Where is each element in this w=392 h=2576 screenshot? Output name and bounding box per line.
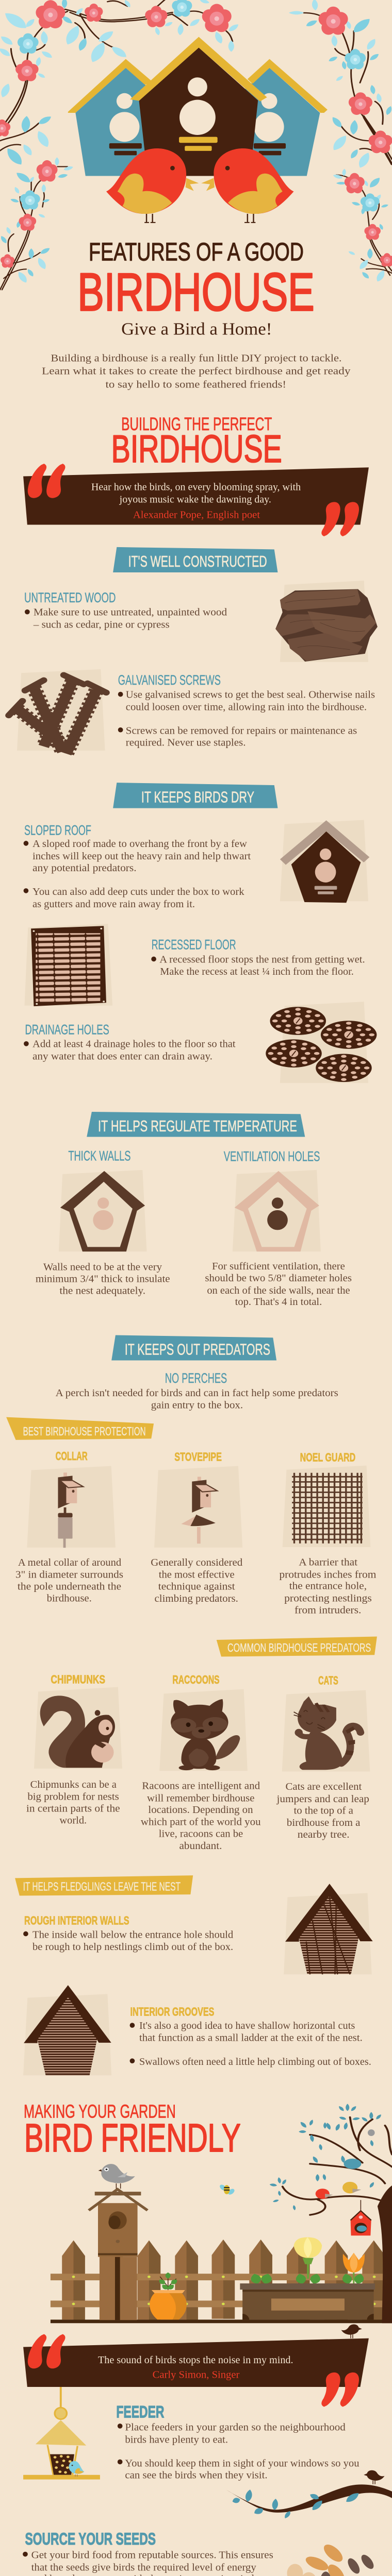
text block: raccoons: which part of the world you bbox=[141, 1816, 261, 1827]
panel: collar: the pole underneath the bbox=[18, 1581, 121, 1592]
illustration: lower right blossom branches bbox=[332, 168, 392, 283]
panel: ventilation holes: VENTILATION HOLES bbox=[224, 1149, 320, 1164]
panel: ventilation holes: top. That's 4 in total. bbox=[235, 1296, 322, 1307]
panel: collar: birdhouse. bbox=[47, 1592, 92, 1604]
text block: cats bbox=[276, 1781, 369, 1840]
illustration: rough interior birdhouse bbox=[284, 1884, 373, 1974]
text block: cats: Cats are excellent bbox=[286, 1781, 362, 1792]
panel: noel guard: A barrier that bbox=[299, 1556, 358, 1568]
text block: feeder: birds have plenty to eat. bbox=[125, 2433, 228, 2445]
icon: small bird on quote bbox=[341, 2324, 362, 2338]
panel: noel guard: from intruders. bbox=[295, 1604, 361, 1616]
text block: cats: nearby tree. bbox=[298, 1828, 350, 1840]
subtitle: Give a Bird a Home! bbox=[121, 319, 272, 338]
panel: collar: COLLAR bbox=[56, 1450, 88, 1463]
panel: stovepipe bbox=[151, 1451, 242, 1604]
text block: untreated wood bbox=[24, 590, 227, 630]
text block: cats: jumpers and can leap bbox=[276, 1793, 369, 1804]
text block: chipmunks: world. bbox=[59, 1815, 87, 1826]
panel: collar: A metal collar of around bbox=[18, 1556, 121, 1568]
text block: rough interior walls bbox=[23, 1914, 233, 1953]
panel: cats: CATS bbox=[318, 1674, 338, 1687]
tree bbox=[269, 2104, 392, 2323]
section: introduction bbox=[23, 319, 378, 662]
text block: rough interior walls: be rough to help nestlings climb out of the box. bbox=[32, 1941, 233, 1953]
intro text block: Learn what it takes to create the perfect birdhouse and get ready bbox=[42, 365, 351, 377]
grey bird bbox=[98, 2164, 135, 2189]
text block: sloped roof bbox=[24, 823, 251, 910]
text block: interior grooves bbox=[130, 2006, 371, 2067]
text block: sloped roof: You can also add deep cuts under the box to work bbox=[32, 886, 244, 897]
text block: recessed floor bbox=[151, 937, 365, 977]
text block: rough interior walls: ROUGH INTERIOR WALLS bbox=[24, 1914, 129, 1927]
text block: untreated wood: – such as cedar, pine or cypress bbox=[33, 619, 170, 630]
section: predators and protection bbox=[6, 1335, 376, 1616]
text block: sloped roof: A sloped roof made to overhang the front by a few bbox=[32, 838, 247, 850]
quote panel: Alexander Pope: joyous music wake the dawning day. bbox=[119, 493, 271, 505]
quote panel: Carly Simon: The sound of birds stops the noise in my mind. bbox=[98, 2354, 293, 2365]
text block: source your seeds bbox=[23, 2530, 273, 2576]
text block: raccoons: Racoons are intelligent and bbox=[142, 1780, 260, 1791]
orange pot bbox=[150, 2290, 187, 2319]
illustration: wood planks bbox=[275, 581, 378, 662]
text block: no perches: NO PERCHES bbox=[165, 1370, 227, 1386]
text block: chipmunks: big problem for nests bbox=[27, 1790, 119, 1802]
text block: raccoons: will remember birdhouse bbox=[147, 1792, 255, 1804]
illustration: bird feeder bbox=[23, 2387, 100, 2480]
illustration: right bird bbox=[201, 148, 294, 223]
text block: raccoons: locations. Depending on bbox=[148, 1804, 253, 1815]
panel: noel guard bbox=[279, 1451, 376, 1616]
heading: making your garden bird friendly: MAKING YOUR GARDEN bbox=[24, 2102, 176, 2122]
quote panel: Alexander Pope: Hear how the birds, on every blooming spray, with bbox=[91, 481, 301, 493]
illustration: seeds bbox=[282, 2542, 379, 2576]
flowers and plants bbox=[157, 2238, 365, 2291]
title bbox=[77, 238, 315, 322]
banner: common birdhouse predators bbox=[217, 1637, 377, 1656]
panel: thick walls bbox=[36, 1148, 170, 1296]
intro text block: to say hello to some feathered friends! bbox=[106, 378, 286, 390]
quote panel: Carly Simon: Carly Simon, Singer bbox=[153, 2369, 240, 2380]
text block: no perches: A perch isn't needed for birds and can in fact help some predators bbox=[56, 1387, 338, 1399]
text block: sloped roof: as gutters and move rain away from it. bbox=[32, 898, 195, 910]
illustration: galvanised screws bbox=[9, 669, 106, 754]
section: interior grooves and garden scene bbox=[23, 1985, 392, 2323]
illustration: top right blossom branches bbox=[289, 0, 392, 169]
text block: feeder: Place feeders in your garden so the neighbourhood bbox=[125, 2421, 346, 2433]
text block: raccoons bbox=[141, 1780, 261, 1851]
text block: untreated wood: UNTREATED WOOD bbox=[24, 590, 116, 606]
panel: collar bbox=[15, 1450, 123, 1604]
banner: best birdhouse protection: BEST BIRDHOUSE PROTECTION bbox=[23, 1425, 146, 1438]
heading: building the perfect birdhouse: BIRDHOUSE bbox=[111, 427, 282, 470]
text block: feeder bbox=[116, 2403, 359, 2481]
text block: source your seeds: that the seeds give birds the required level of energy bbox=[31, 2561, 257, 2573]
text block: galvanised screws bbox=[118, 673, 375, 748]
panel: stovepipe: STOVEPIPE bbox=[174, 1451, 222, 1464]
text block: drainage holes bbox=[24, 1022, 236, 1062]
illustration: left bird bbox=[106, 148, 199, 223]
illustration: branch with bird bbox=[226, 2470, 392, 2519]
quote panel: Carly Simon bbox=[23, 2334, 369, 2407]
heading: building the perfect birdhouse bbox=[111, 414, 282, 470]
section: carly simon quote, feeder and seeds bbox=[23, 2324, 392, 2576]
quote panel: Alexander Pope bbox=[23, 464, 369, 536]
panel: raccoons bbox=[159, 1673, 248, 1771]
text block: feeder: can see the birds when they visit. bbox=[125, 2469, 268, 2481]
panel: thick walls: Walls need to be at the very bbox=[43, 1261, 162, 1273]
illustration: sloped roof birdhouse bbox=[280, 820, 369, 903]
banner: it helps regulate temperature bbox=[87, 1112, 305, 1137]
panel: cats bbox=[282, 1674, 370, 1771]
banner: it's well constructed: IT'S WELL CONSTRUCTED bbox=[128, 553, 267, 570]
panel: thick walls: the nest adequately. bbox=[59, 1285, 145, 1296]
text block: galvanised screws: Screws can be removed for repairs or maintenance as bbox=[126, 725, 357, 736]
wooden birdhouse on post bbox=[89, 2189, 148, 2320]
panel: noel guard: protecting nestlings bbox=[284, 1592, 372, 1604]
panel: ventilation holes: on each of the side walls, near the bbox=[207, 1284, 350, 1296]
banner: it keeps out predators bbox=[111, 1335, 276, 1361]
panel: noel guard: the entrance hole, bbox=[289, 1580, 367, 1591]
text block: feeder: FEEDER bbox=[116, 2403, 164, 2421]
text block: galvanised screws: required. Never use staples. bbox=[126, 737, 246, 748]
text block: cats: birdhouse from a bbox=[287, 1817, 361, 1828]
text block: chipmunks: Chipmunks can be a bbox=[30, 1778, 117, 1790]
illustration: top left blossom branches bbox=[0, 0, 240, 167]
heading: making your garden bird friendly bbox=[24, 2102, 241, 2160]
text block: rough interior walls: The inside wall below the entrance hole should bbox=[32, 1928, 233, 1940]
text block: sloped roof: any potential predators. bbox=[32, 862, 137, 874]
illustration: garden scene with fence, birdhouse, tree and planters bbox=[51, 2104, 392, 2323]
panel: stovepipe: Generally considered bbox=[151, 1556, 242, 1568]
panel: stovepipe: climbing predators. bbox=[155, 1592, 238, 1604]
text block: source your seeds: Get your bird food from reputable sources. This ensures bbox=[31, 2549, 273, 2561]
text block: recessed floor: RECESSED FLOOR bbox=[152, 937, 236, 953]
banner: it keeps birds dry bbox=[113, 783, 277, 808]
panel: ventilation holes: should be two 5/8" diameter holes bbox=[205, 1272, 352, 1284]
text block: chipmunks: in certain parts of the bbox=[26, 1802, 120, 1814]
intro text block: Building a birdhouse is a really fun little DIY project to tackle. bbox=[51, 352, 342, 364]
section: hero bbox=[0, 0, 392, 322]
panel: ventilation holes: For sufficient ventilation, there bbox=[212, 1260, 345, 1272]
panel: collar: 3" in diameter surrounds bbox=[15, 1568, 123, 1580]
banner: it helps fledglings leave the nest bbox=[15, 1875, 193, 1896]
panel: noel guard: protrudes inches from bbox=[279, 1568, 376, 1580]
panel: ventilation holes bbox=[205, 1149, 352, 1307]
banner: it keeps out predators: IT KEEPS OUT PREDATORS bbox=[125, 1341, 270, 1359]
panel: thick walls: THICK WALLS bbox=[68, 1148, 130, 1164]
banner: it keeps birds dry: IT KEEPS BIRDS DRY bbox=[141, 788, 254, 806]
panel: stovepipe: the most effective bbox=[159, 1568, 235, 1580]
text block: drainage holes: DRAINAGE HOLES bbox=[25, 1022, 109, 1038]
fence pickets bbox=[51, 2240, 392, 2323]
text block: interior grooves: It's also a good idea to have shallow horizontal cuts bbox=[139, 2020, 355, 2031]
section: screws and keeping dry bbox=[9, 669, 375, 1006]
text block: raccoons: abundant. bbox=[179, 1840, 222, 1851]
quote panel: Alexander Pope: Alexander Pope, English poet bbox=[133, 509, 260, 520]
text block: galvanised screws: GALVANISED SCREWS bbox=[118, 673, 221, 688]
text block: drainage holes: any water that does enter can drain away. bbox=[32, 1050, 213, 1062]
illustration: lower left blossom branches bbox=[0, 157, 74, 290]
text block: chipmunks bbox=[26, 1778, 120, 1826]
illustration: drainage discs bbox=[266, 1002, 377, 1083]
section: common predators and fledglings bbox=[15, 1637, 377, 1974]
illustration: three birdhouses bbox=[68, 37, 328, 176]
banner: it's well constructed bbox=[113, 547, 277, 572]
text block: no perches: gain entry to the box. bbox=[151, 1399, 243, 1411]
bee bbox=[219, 2184, 236, 2196]
text block: no perches bbox=[56, 1370, 338, 1411]
banner: it helps fledglings leave the nest: IT HELPS FLEDGLINGS LEAVE THE NEST bbox=[23, 1880, 181, 1893]
text block: recessed floor: Make the recess at least ¼ inch from the floor. bbox=[160, 965, 354, 977]
panel: chipmunks: CHIPMUNKS bbox=[51, 1673, 105, 1686]
heading: building the perfect birdhouse: BUILDING THE PERFECT bbox=[121, 414, 272, 434]
heading: making your garden bird friendly: BIRD FRIENDLY bbox=[24, 2116, 241, 2160]
intro text block bbox=[42, 352, 351, 390]
panel: thick walls: minimum 3/4" thick to insulate bbox=[36, 1273, 170, 1284]
text block: sloped roof: inches will keep out the heavy rain and help thwart bbox=[32, 850, 251, 861]
text block: untreated wood: Make sure to use untreated, unpainted wood bbox=[34, 606, 227, 618]
text block: drainage holes: Add at least 4 drainage holes to the floor so that bbox=[32, 1038, 236, 1049]
text block: sloped roof: SLOPED ROOF bbox=[24, 823, 91, 838]
section: drainage and temperature bbox=[24, 1002, 377, 1307]
text block: interior grooves: INTERIOR GROOVES bbox=[130, 2006, 214, 2019]
panel: raccoons: RACCOONS bbox=[172, 1673, 220, 1687]
illustration: interior grooves birdhouse bbox=[23, 1985, 111, 2075]
planter box bbox=[240, 2283, 375, 2319]
text block: source your seeds: SOURCE YOUR SEEDS bbox=[25, 2530, 156, 2548]
illustration: recessed floor grate bbox=[24, 924, 112, 1006]
text block: raccoons: live, racoons can be bbox=[159, 1827, 243, 1839]
panel: stovepipe: technique against bbox=[158, 1581, 235, 1592]
panel: chipmunks bbox=[34, 1673, 122, 1769]
text block: cats: to the top of a bbox=[294, 1804, 353, 1816]
banner: best birdhouse protection bbox=[6, 1417, 154, 1440]
